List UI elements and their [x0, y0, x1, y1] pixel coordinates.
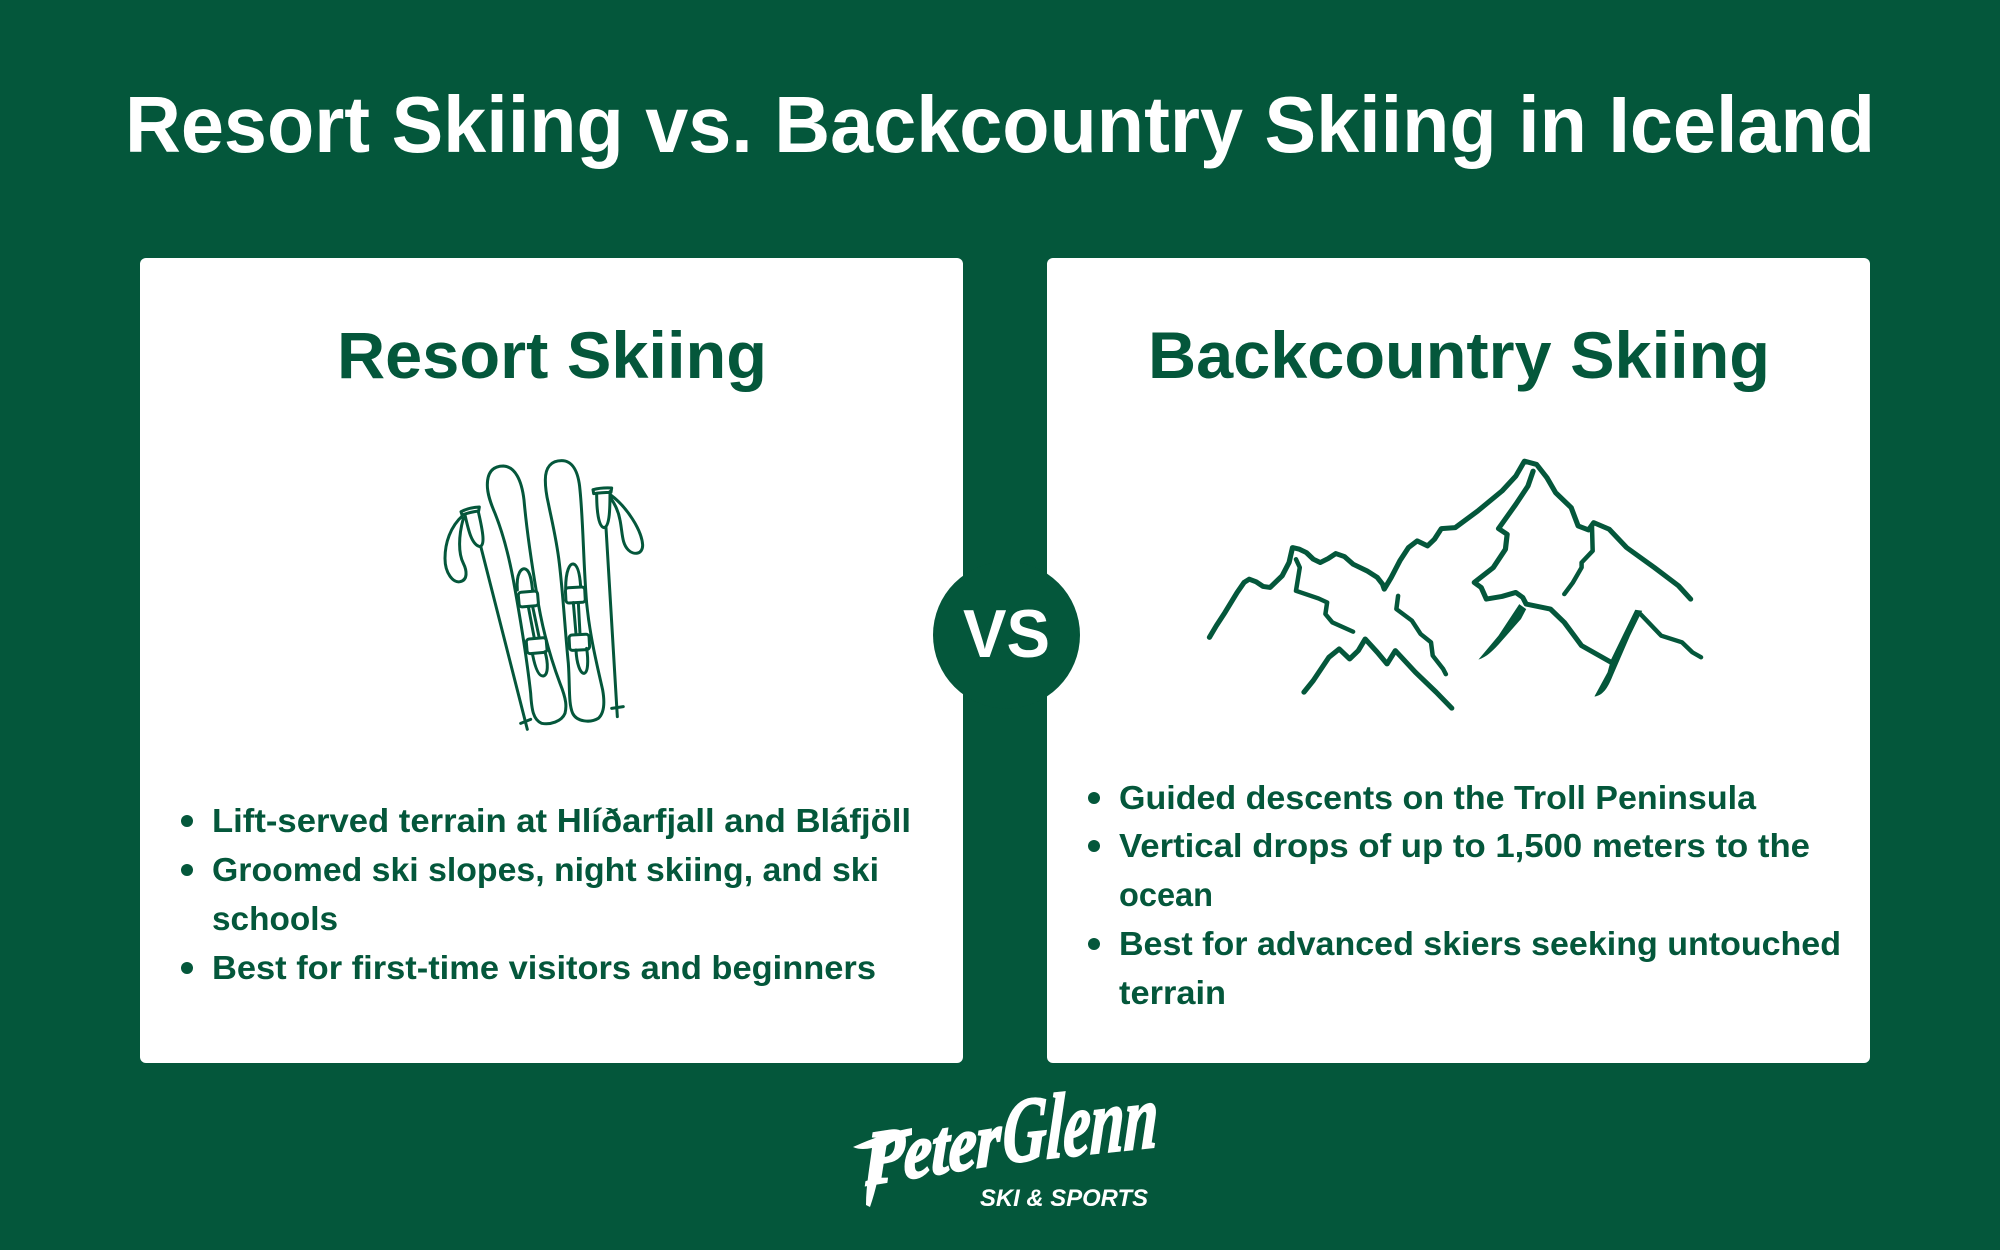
- list: backcountry skiing points: ocean: [1119, 876, 1213, 913]
- title: Resort Skiing vs. Backcountry Skiing in Iceland: [125, 80, 1875, 169]
- icon: mountains: [1209, 461, 1701, 708]
- list: backcountry skiing points: terrain: [1119, 974, 1226, 1011]
- icon: skis and poles: [445, 461, 643, 729]
- list: backcountry skiing points: Vertical drops of up to 1,500 meters to the: [1119, 827, 1810, 864]
- heading: backcountry skiing: Backcountry Skiing: [1148, 318, 1770, 392]
- list: resort skiing points: schools: [212, 900, 338, 937]
- list: resort skiing points: Best for first-time visitors and beginners: [212, 949, 876, 986]
- panel: resort skiing: [140, 258, 963, 1063]
- badge: VS: [933, 562, 1080, 708]
- list: resort skiing points: Lift-served terrain at Hlíðarfjall and Bláfjöll: [212, 802, 911, 839]
- logo: Peter Glenn Ski & Sports: [853, 1064, 1160, 1212]
- list: backcountry skiing points: [1088, 779, 1841, 1011]
- logo: Peter Glenn Ski & Sports: Glenn: [1001, 1064, 1160, 1183]
- badge: VS: VS: [963, 596, 1050, 672]
- heading: resort skiing: Resort Skiing: [337, 318, 767, 392]
- logo: Peter Glenn Ski & Sports: SKI & SPORTS: [980, 1185, 1148, 1212]
- list: backcountry skiing points: Guided descents on the Troll Peninsula: [1119, 779, 1757, 816]
- panel: backcountry skiing: [1047, 258, 1870, 1063]
- list: resort skiing points: [181, 802, 911, 986]
- logo: Peter Glenn Ski & Sports: Peter: [865, 1095, 1002, 1202]
- list: resort skiing points: Groomed ski slopes, night skiing, and ski: [212, 851, 879, 888]
- list: backcountry skiing points: Best for advanced skiers seeking untouched: [1119, 925, 1841, 962]
